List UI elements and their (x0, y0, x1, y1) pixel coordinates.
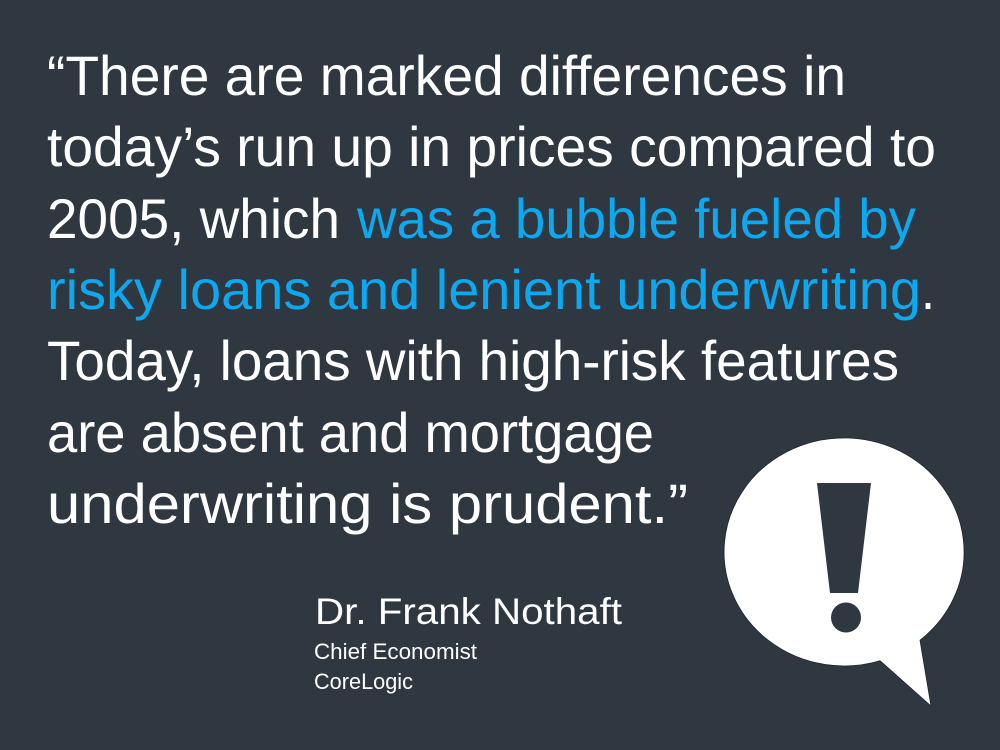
attribution: CoreLogic (314, 669, 413, 694)
quote text: Today, loans with high-risk features (47, 329, 899, 392)
icon: speech bubble with exclamation mark (724, 438, 964, 706)
attribution (314, 591, 623, 694)
quote text (47, 44, 936, 535)
attribution: Chief Economist (314, 639, 477, 664)
quote text: underwriting is prudent.” (47, 472, 688, 535)
quote text: “There are marked differences in (47, 44, 846, 107)
quote text: was a bubble fueled by (356, 187, 916, 250)
quote text: today’s run up in prices compared to (47, 115, 936, 178)
attribution: Dr. Frank Nothaft (315, 591, 623, 632)
quote text: 2005, which (47, 187, 340, 250)
quote text: risky loans and lenient underwriting (47, 258, 921, 321)
quote text: . (921, 258, 935, 321)
quote text: are absent and mortgage (47, 401, 654, 464)
